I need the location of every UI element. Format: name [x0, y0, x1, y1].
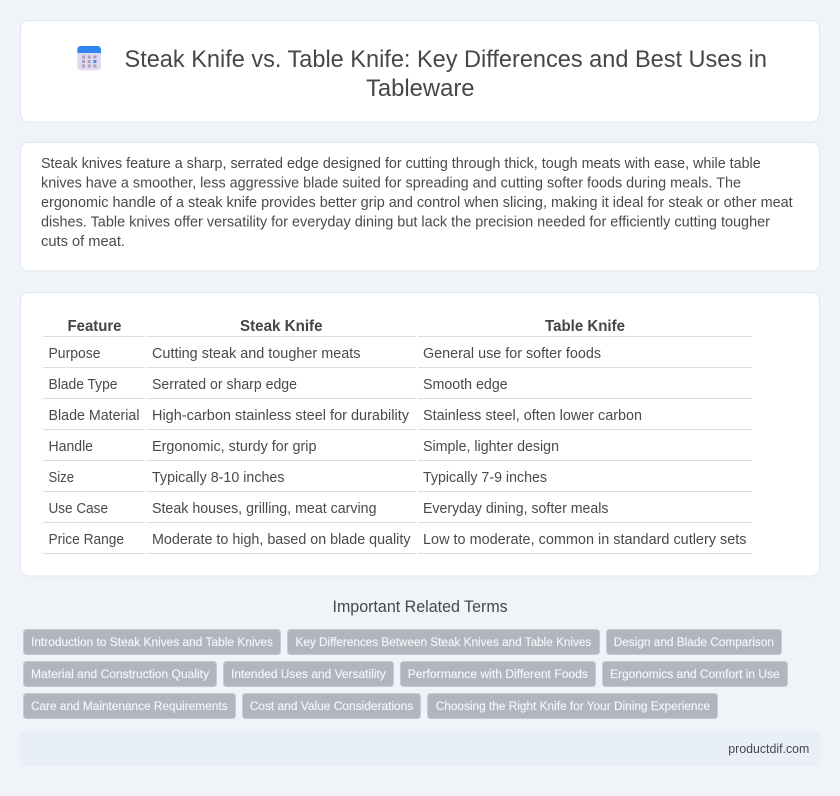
table row: blade material — [48, 408, 642, 424]
text block: description: dishes. Table knives offer versatility for everyday dining but lack the precision needed for efficiently cutting tougher — [41, 214, 770, 230]
table row: use case — [48, 501, 608, 517]
tag: Choosing the Right Knife for Your Dining Experience — [436, 699, 710, 713]
table row: handle: Handle — [48, 439, 93, 455]
table row: purpose: Purpose — [48, 346, 101, 362]
table row: blade material: Stainless steel, often lower carbon — [423, 408, 642, 424]
table row: handle — [48, 439, 559, 455]
footer bar — [20, 732, 820, 766]
table row: purpose: Cutting steak and tougher meats — [152, 346, 360, 362]
table row: blade type — [48, 377, 508, 393]
text block: description: cuts of meat. — [41, 234, 125, 250]
text block: description: Steak knives feature a sharp, serrated edge designed for cutting through thick, tough meats with ease, while table — [41, 156, 761, 172]
heading: related terms: Important Related Terms — [332, 598, 508, 616]
table header row: Feature — [68, 318, 122, 335]
tag — [224, 662, 394, 686]
tag: Care and Maintenance Requirements — [31, 699, 228, 713]
tag — [24, 662, 216, 686]
tag — [24, 694, 236, 718]
tag: Performance with Different Foods — [408, 667, 588, 681]
table row: size: Typically 7-9 inches — [423, 470, 547, 486]
table row: purpose — [48, 346, 601, 362]
table header row: Table Knife — [545, 318, 625, 335]
tag: Key Differences Between Steak Knives and Table Knives — [296, 635, 591, 649]
table row: use case: Everyday dining, softer meals — [423, 501, 608, 517]
tag: Design and Blade Comparison — [614, 635, 774, 649]
panel: title header — [20, 20, 820, 122]
title: Tableware — [366, 75, 474, 102]
title — [124, 46, 767, 102]
table row: price range: Low to moderate, common in standard cutlery sets — [423, 532, 746, 548]
tags: related terms — [24, 630, 788, 718]
table row: purpose: General use for softer foods — [423, 346, 601, 362]
tag: Cost and Value Considerations — [250, 699, 413, 713]
panel: comparison table — [20, 292, 820, 576]
table row: blade material: High-carbon stainless steel for durability — [152, 408, 410, 424]
table row: blade material: Blade Material — [48, 408, 140, 424]
table row: use case: Use Case — [48, 501, 108, 517]
tag — [400, 662, 596, 686]
tag: Ergonomics and Comfort in Use — [610, 667, 780, 681]
tag — [24, 630, 280, 654]
table row: size: Size — [48, 470, 74, 486]
panel: intro paragraph — [20, 142, 820, 271]
table row: blade type: Serrated or sharp edge — [152, 377, 297, 393]
table row: blade type: Blade Type — [48, 377, 118, 393]
tag: Introduction to Steak Knives and Table Knives — [31, 635, 273, 649]
table row: size — [48, 470, 547, 486]
tag: Material and Construction Quality — [31, 667, 210, 681]
text block: description: ergonomic handle of a steak knife provides better grip and control when slicing, making it ideal for steak or other meat — [41, 195, 793, 211]
tag — [242, 694, 420, 718]
table row: use case: Steak houses, grilling, meat carving — [152, 501, 377, 517]
tag — [602, 662, 788, 686]
title: Steak Knife vs. Table Knife: Key Differences and Best Uses in — [124, 46, 767, 73]
table row: price range: Moderate to high, based on blade quality — [152, 532, 411, 548]
table row: blade type: Smooth edge — [423, 377, 508, 393]
tag: Intended Uses and Versatility — [231, 667, 387, 681]
table row: size: Typically 8-10 inches — [152, 470, 284, 486]
tag — [288, 630, 600, 654]
footer source text: productdif.com — [728, 741, 809, 756]
table header row: Steak Knife — [240, 318, 323, 335]
table row: price range: Price Range — [48, 532, 124, 548]
table row: handle: Ergonomic, sturdy for grip — [152, 439, 317, 455]
text block: description — [41, 156, 793, 250]
table row: handle: Simple, lighter design — [423, 439, 559, 455]
table row: price range — [48, 532, 746, 548]
tag — [428, 694, 718, 718]
table header row — [68, 318, 625, 335]
text block: description: knives have a smoother, less aggressive blade suited for spreading and cutting softer foods during meals. The — [41, 176, 741, 192]
tag — [606, 630, 782, 654]
icon: calendar — [77, 46, 101, 70]
